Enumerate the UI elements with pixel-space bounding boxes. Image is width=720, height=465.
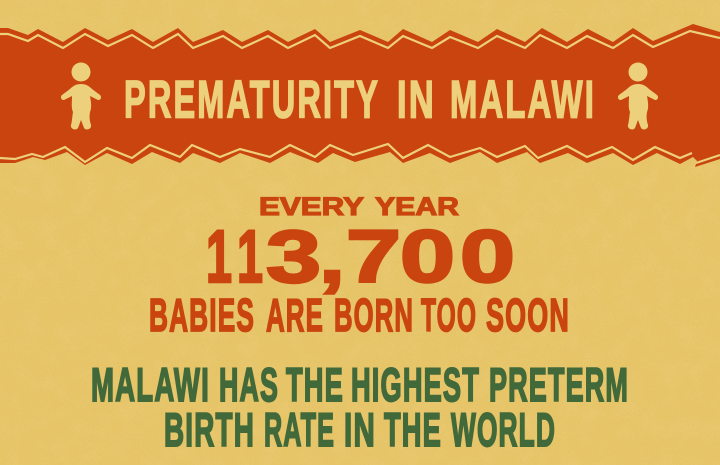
title: IN bbox=[397, 70, 436, 130]
statement: highest preterm birth rate: THE bbox=[384, 403, 442, 456]
subheading: every year: EVERY bbox=[259, 193, 364, 221]
icon: baby left bbox=[61, 62, 101, 129]
statement: highest preterm birth rate: HAS bbox=[219, 358, 279, 411]
icon: baby right bbox=[618, 62, 658, 129]
statement: highest preterm birth rate: RATE bbox=[264, 403, 335, 456]
text: babies born too soon: TOO bbox=[421, 289, 477, 341]
big number bbox=[206, 215, 515, 298]
big number: 0 bbox=[460, 215, 515, 298]
title: PREMATURITY bbox=[124, 70, 380, 130]
big number: 0 bbox=[400, 215, 455, 298]
banner bbox=[0, 24, 720, 167]
statement: highest preterm birth rate: HIGHEST bbox=[351, 358, 480, 411]
subheading: every year: YEAR bbox=[375, 193, 459, 221]
big number: , bbox=[319, 215, 345, 298]
text: babies born too soon: BORN bbox=[334, 289, 414, 341]
statement: highest preterm birth rate: IN bbox=[344, 403, 376, 456]
title: MALAWI bbox=[450, 70, 596, 130]
text: babies born too soon: BABIES bbox=[149, 289, 255, 341]
statement: highest preterm birth rate: BIRTH bbox=[164, 403, 255, 456]
text: babies born too soon: ARE bbox=[266, 289, 324, 341]
statement: highest preterm birth rate: MALAWI bbox=[91, 358, 210, 411]
subheading: every year bbox=[259, 193, 459, 221]
statement: highest preterm birth rate bbox=[91, 358, 629, 456]
text: babies born too soon bbox=[149, 289, 570, 341]
big number: 7 bbox=[346, 215, 401, 298]
big number: 3 bbox=[266, 215, 321, 298]
big number: 1 bbox=[206, 215, 232, 298]
statement: highest preterm birth rate: THE bbox=[286, 358, 344, 411]
big number: 1 bbox=[237, 215, 263, 298]
statement: highest preterm birth rate: WORLD bbox=[451, 403, 556, 456]
text: babies born too soon: SOON bbox=[486, 289, 570, 341]
